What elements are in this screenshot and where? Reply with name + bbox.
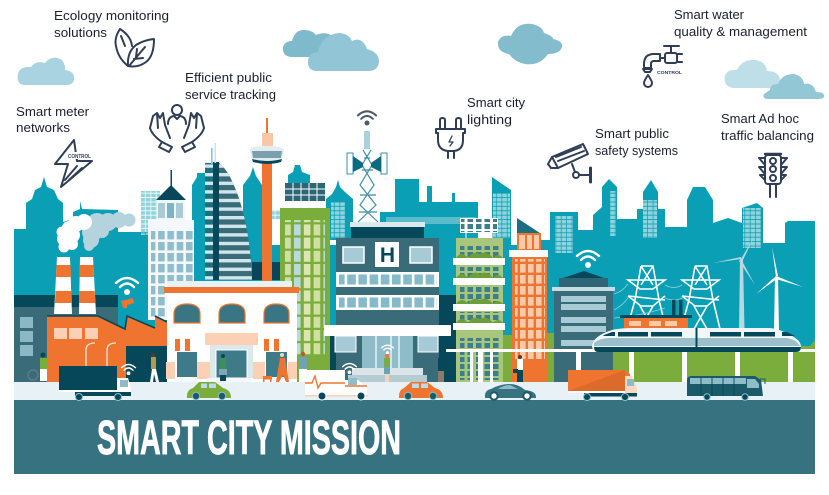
- cloud: centre front: [308, 33, 379, 71]
- title band: [14, 400, 815, 474]
- wind turbine: right: [756, 247, 803, 330]
- elevated rail bridge: [446, 349, 815, 382]
- icon: hands holding person: [150, 105, 204, 152]
- road: [14, 382, 815, 400]
- label: smart meter networks: networks: [16, 120, 71, 135]
- shop: [164, 281, 299, 382]
- title: SMART CITY MISSION: [97, 412, 401, 465]
- label: public service tracking: Efficient public: [185, 70, 273, 85]
- icon: traffic light: [759, 154, 787, 197]
- high-speed train: [592, 328, 801, 352]
- cloud: right upper: [725, 60, 780, 88]
- vehicle: ambulance: [305, 370, 368, 400]
- person walking dog: [263, 353, 289, 382]
- vehicle: orange car: [399, 382, 443, 400]
- icon: water tap: [643, 46, 682, 87]
- vehicle: orange truck: [568, 370, 637, 400]
- label: ecology monitoring: Ecology monitoring: [54, 8, 169, 23]
- right grey building: [552, 271, 615, 382]
- person: by ambulance: [299, 352, 307, 382]
- wifi: ambulance: [343, 364, 356, 374]
- icon: lightning control: CONTROL: [68, 154, 92, 160]
- power pylons: [614, 266, 720, 329]
- icon: leaves: [116, 29, 154, 66]
- camera: factory: [121, 298, 134, 308]
- person: hospital right: [438, 354, 444, 382]
- icon: plug: [436, 118, 465, 158]
- smoke: [56, 212, 136, 252]
- person: with briefcase: [513, 355, 523, 382]
- person: shop doorway: [219, 354, 227, 381]
- observation tower: [250, 118, 284, 281]
- skyline: teal background: [14, 167, 815, 382]
- green tower with solar panel: [280, 165, 330, 382]
- label: ecology monitoring: solutions: [54, 25, 108, 40]
- label: smart city lighting: lighting: [467, 112, 512, 127]
- person: pedestrian 1: [150, 353, 159, 382]
- vehicle: dark truck: [59, 366, 131, 400]
- vehicle: green car: [187, 382, 231, 400]
- cloud: right lower: [763, 74, 824, 99]
- person with bicycle: [28, 352, 55, 381]
- hospital: [324, 222, 456, 382]
- curved skyscraper: [205, 143, 281, 280]
- icon: water tap: CONTROL: [657, 70, 682, 76]
- white office tower: [148, 170, 194, 320]
- green ground right: [613, 340, 815, 382]
- cloud: centre back: [283, 30, 337, 57]
- skyline: windows over hospital block: [386, 217, 476, 224]
- rooftop solar panel: [460, 218, 498, 238]
- factory chimneys: [54, 257, 96, 314]
- label: ad hoc traffic balancing: traffic balancing: [721, 128, 814, 143]
- vehicle: bus: [687, 376, 765, 400]
- label: smart public safety systems: Smart public: [595, 126, 670, 141]
- cloud: top middle: [498, 24, 562, 64]
- label: smart public safety systems: safety systems: [595, 143, 678, 158]
- factory: [47, 316, 167, 382]
- wifi: hospital: [382, 345, 393, 354]
- vertical garden building: [453, 238, 505, 382]
- left grey building: [14, 295, 118, 382]
- vehicle: teal sedan: [485, 384, 536, 400]
- label: smart city lighting: Smart city: [467, 95, 525, 110]
- orange building: [503, 218, 554, 382]
- telecom tower: [347, 111, 387, 222]
- wind turbine: left: [713, 237, 755, 330]
- wifi: right building: [577, 251, 599, 268]
- person: hospital steps: [384, 354, 390, 382]
- label: smart meter networks: Smart meter: [16, 104, 90, 119]
- icon: lightning control: [55, 140, 92, 187]
- substation: [620, 300, 692, 330]
- cloud: left: [18, 58, 74, 85]
- hospital H sign: H: [380, 244, 395, 267]
- label: smart water quality: quality & management: [674, 24, 807, 39]
- icon: security camera: [548, 144, 590, 182]
- label: ad hoc traffic balancing: Smart Ad hoc: [721, 111, 799, 126]
- label: smart water quality: Smart water: [674, 7, 745, 22]
- skyline: lit windows: [141, 191, 761, 253]
- label: public service tracking: service tracking: [185, 87, 276, 102]
- wifi: truck: [122, 364, 135, 375]
- wifi: factory: [116, 278, 138, 295]
